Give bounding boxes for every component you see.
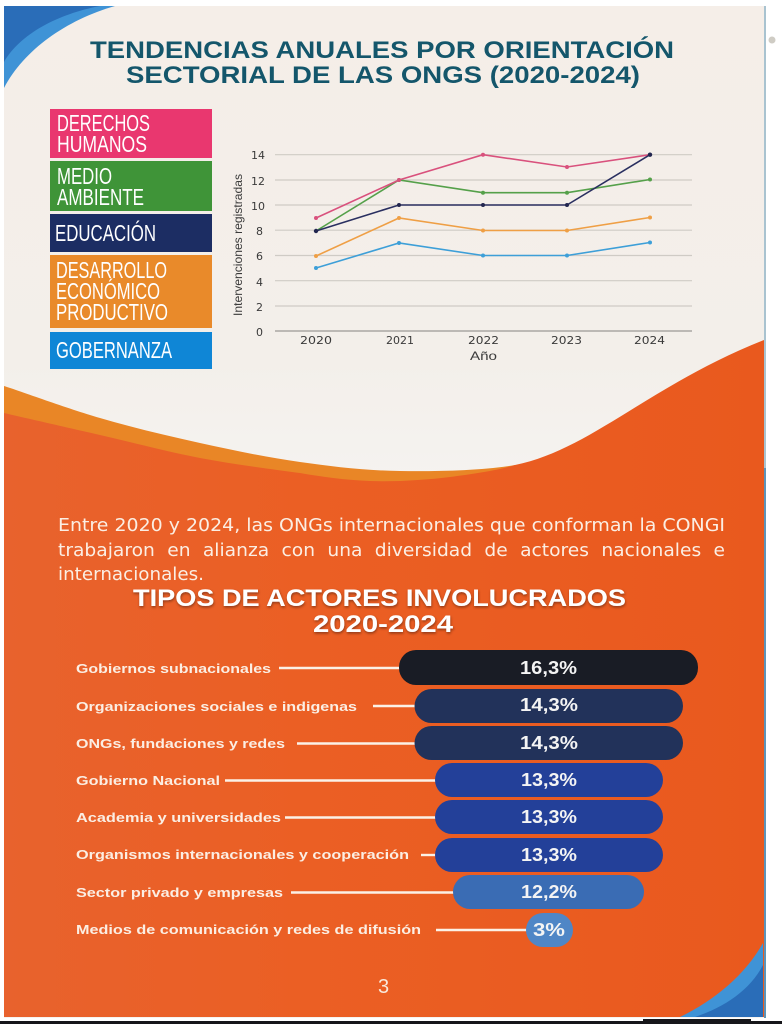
row: Medios de comunicación y redes de difusión: Medios de comunicación y redes de difusión [76,922,421,937]
row: Medios de comunicación y redes de difusión: 3% [533,919,565,940]
legend item: Medio Ambiente: AMBIENTE [57,184,144,210]
row: Gobiernos subnacionales [76,650,698,685]
orange lower panel with wave [4,340,764,1017]
series: Desarrollo Económico Productivo [314,216,652,258]
row: Sector privado y empresas [76,875,644,909]
legend item: Desarrollo Económico Productivo: DESARROLLO [56,257,167,283]
row: Academia y universidades: 13,3% [521,806,577,827]
x axis title: Año [470,349,497,363]
y axis labels: 12 [251,175,265,188]
y axis labels: 14 [251,149,265,162]
y axis labels [251,149,265,339]
section heading: TIPOS DE ACTORES INVOLUCRADOS [133,585,626,612]
row: Gobiernos subnacionales: Gobiernos subnacionales [76,661,271,676]
row: Academia y universidades: Academia y universidades [76,810,281,825]
intro paragraph: trabajaron en alianza con una diversidad de actores nacionales e [58,541,725,561]
row: Gobierno Nacional [76,763,663,797]
legend item: Derechos Humanos [50,109,212,158]
line chart [231,149,692,363]
section heading: 2020-2024 [313,611,454,638]
legend item: Derechos Humanos: HUMANOS [57,131,147,157]
row: ONGs, fundaciones y redes [76,726,683,760]
y axis labels: 8 [256,225,263,238]
actors chart [76,650,698,947]
row: ONGs, fundaciones y redes: ONGs, fundaciones y redes [76,736,285,751]
legend item: Desarrollo Económico Productivo: PRODUCTIVO [56,299,168,325]
row: Medios de comunicación y redes de difusión [76,913,573,947]
row: Organismos internacionales y cooperación: 13,3% [521,844,577,865]
row: Organizaciones sociales e indigenas: Organizaciones sociales e indigenas [76,699,357,714]
intro paragraph: internacionales. [58,565,204,585]
y axis labels: 10 [251,200,265,213]
x axis labels: 2020 [300,334,332,347]
series: Derechos Humanos [314,153,650,220]
title: SECTORIAL DE LAS ONGS (2020-2024) [126,62,640,89]
intro paragraph [58,516,725,585]
legend item: Desarrollo Económico Productivo [50,255,212,328]
row: Organizaciones sociales e indigenas [76,689,683,723]
y axis title: Intervenciones registradas [231,174,245,316]
y axis labels: 0 [256,326,263,339]
row: Sector privado y empresas: Sector privado y empresas [76,885,283,900]
series: Medio Ambiente [316,178,652,231]
intro paragraph: Entre 2020 y 2024, las ONGs internacionales que conforman la CONGI [58,516,725,536]
row: ONGs, fundaciones y redes: 14,3% [520,732,578,753]
y axis labels: 2 [256,301,263,314]
chart grid [275,155,692,331]
corner decoration: bottom right blue [680,943,763,1017]
legend item: Educación [50,214,212,252]
legend item: Medio Ambiente: MEDIO [57,163,112,189]
x axis labels: 2024 [634,334,665,347]
title: TENDENCIAS ANUALES POR ORIENTACIÓN [90,36,674,64]
x axis labels: 2021 [386,334,414,347]
row: Organizaciones sociales e indigenas: 14,3% [520,694,578,715]
row: Gobierno Nacional: 13,3% [521,769,577,790]
y axis labels: 6 [256,250,263,263]
legend [50,109,212,369]
x axis labels [300,334,665,347]
row: Sector privado y empresas: 12,2% [521,881,577,902]
corner decoration: top left blue [4,6,115,88]
legend item: Desarrollo Económico Productivo: ECONÓMICO [56,278,160,304]
row: Gobiernos subnacionales: 16,3% [520,657,577,678]
y axis labels: 4 [256,276,263,289]
series: Educación [314,152,652,233]
row: Gobierno Nacional: Gobierno Nacional [76,773,220,788]
legend item: Derechos Humanos: DERECHOS [57,110,150,136]
legend item: Educación: EDUCACIÓN [55,220,156,246]
legend item: Gobernanza [50,332,212,369]
x axis labels: 2023 [551,334,582,347]
section heading [133,585,626,638]
series: Gobernanza [314,240,652,270]
row: Academia y universidades [76,800,663,834]
row: Organismos internacionales y cooperación [76,838,663,872]
row: Organismos internacionales y cooperación: Organismos internacionales y cooperación [76,847,409,862]
page number: 3 [378,976,389,998]
legend item: Gobernanza: GOBERNANZA [56,337,172,363]
legend item: Medio Ambiente [50,161,212,211]
x axis labels: 2022 [468,334,499,347]
title [90,36,674,89]
